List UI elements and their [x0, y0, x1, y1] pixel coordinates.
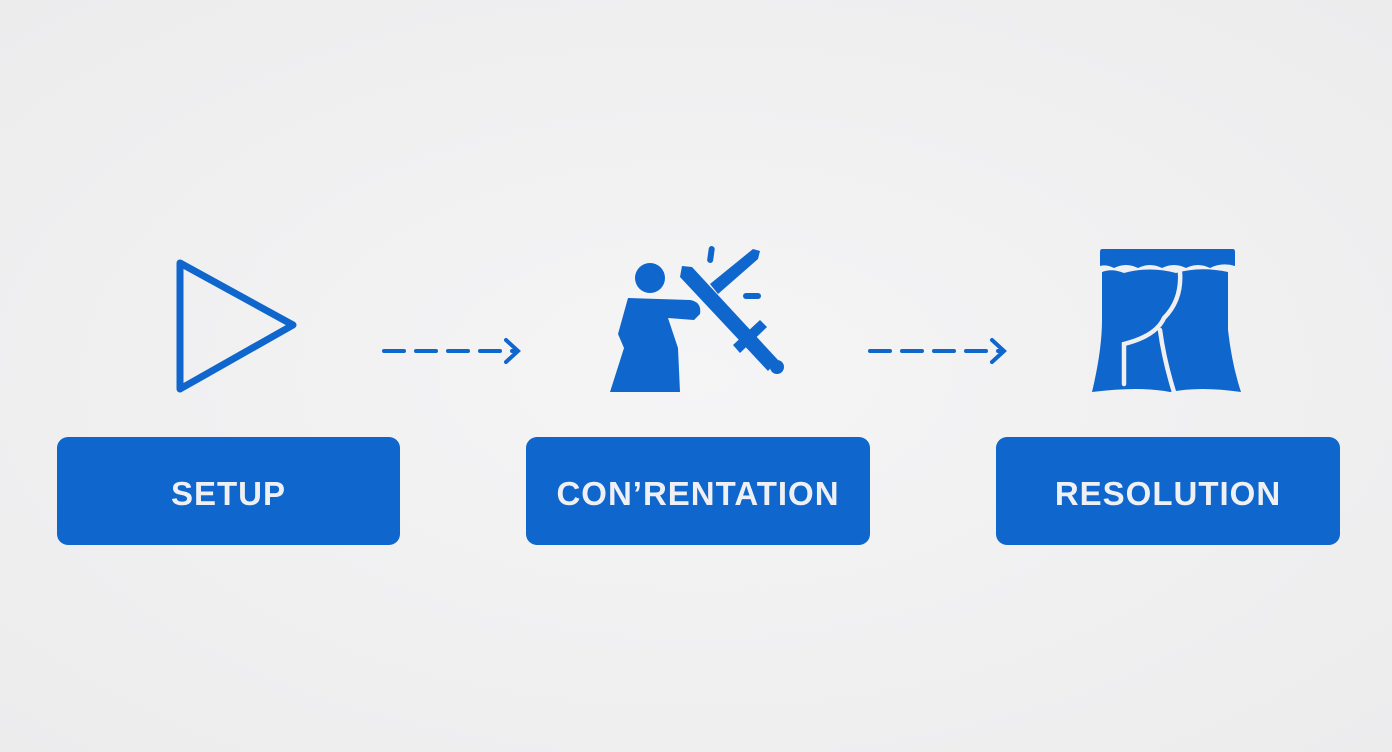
box: confrontation: CON’RENTATION — [556, 474, 840, 512]
box: confrontation — [526, 437, 870, 545]
box: resolution — [996, 437, 1340, 545]
box: setup: SETUP — [171, 474, 286, 512]
box: resolution: RESOLUTION — [1055, 474, 1281, 512]
box: setup — [57, 437, 400, 545]
arrow: confrontation to resolution — [870, 340, 1004, 362]
icon: swordsman — [610, 246, 784, 392]
arrow: setup to confrontation — [384, 340, 518, 362]
icon: play triangle — [180, 263, 293, 389]
icon: curtain — [1092, 249, 1241, 392]
